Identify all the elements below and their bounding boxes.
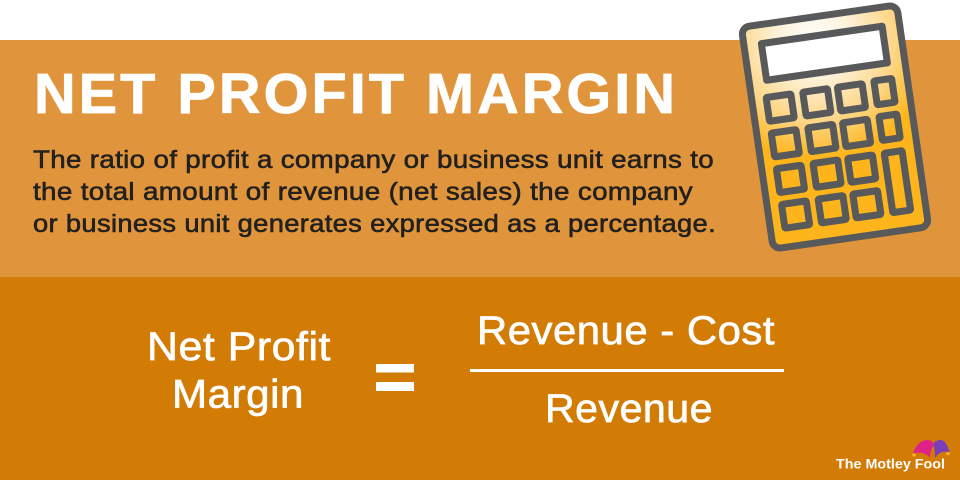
formula label: Net Profit [147,325,331,369]
icon: calculator [741,5,929,249]
formula numerator: Revenue - Cost [477,309,775,353]
equals sign [376,364,414,391]
definition text [33,146,716,238]
formula denominator: Revenue [545,387,713,431]
definition text: The ratio of profit a company or business unit earns to [33,146,714,174]
formula label: Margin [172,372,304,416]
panel: formula band [0,277,960,480]
wordmark: The Motley Fool [836,456,945,472]
formula label [147,325,331,416]
title: NET PROFIT MARGIN [34,62,678,126]
panel: definition band [0,40,960,277]
logo: The Motley Fool [836,440,950,472]
icon: jester hat [912,440,950,458]
fraction bar [470,369,784,372]
definition text: or business unit generates expressed as a percentage. [33,210,716,238]
definition text: the total amount of revenue (net sales) the company [33,178,693,206]
